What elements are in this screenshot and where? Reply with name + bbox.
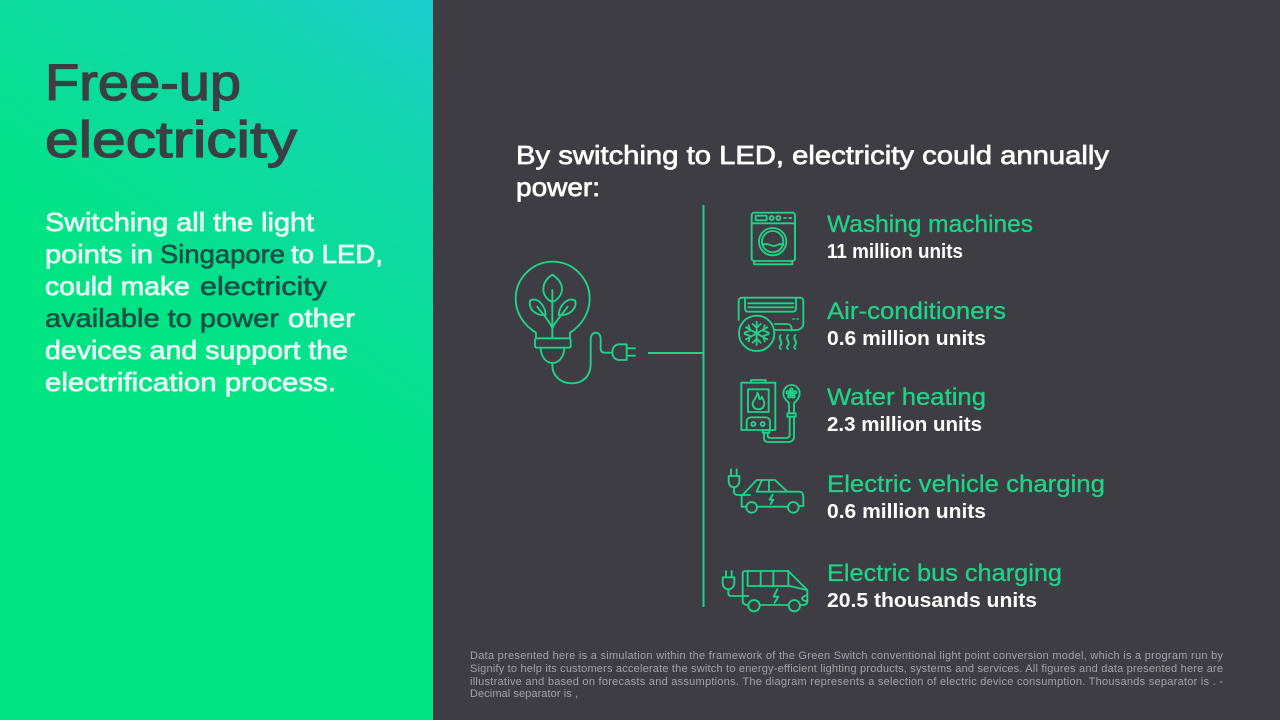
list item: washing machines — [827, 211, 1033, 263]
panel: green gradient sidebar — [0, 0, 433, 720]
list item: electric bus charging: Electric bus charging — [827, 560, 1062, 587]
icon: electric bus with plug — [723, 571, 807, 611]
list item: electric vehicle charging: 0.6 million units — [827, 501, 986, 523]
footnote — [470, 650, 1224, 700]
list item: water heating — [827, 384, 986, 436]
icon: water heater and charger — [741, 380, 800, 442]
icon: light bulb with plant and plug — [516, 262, 635, 383]
title: electricity — [45, 111, 298, 168]
text block: intro paragraph: Switching all the light — [45, 207, 315, 237]
text block: intro paragraph: to LED, — [291, 239, 383, 269]
footnote: illustrative and based on forecasts and assumptions. The diagram represents a selection of electric device consumption. Thousands separator is . - — [470, 676, 1223, 688]
list item: air-conditioners: 0.6 million units — [827, 328, 986, 350]
heading: by switching to LED: By switching to LED, electricity could annually — [516, 140, 1109, 170]
list item: air-conditioners: Air-conditioners — [827, 298, 1006, 325]
text block: intro paragraph: electricity — [200, 271, 327, 301]
footnote: Data presented here is a simulation within the framework of the Green Switch conventional light point conversion model, which is a program run by — [470, 650, 1224, 662]
heading: by switching to LED: power: — [516, 172, 600, 202]
list item: washing machines: 11 million units — [827, 241, 963, 263]
connector: vertical bracket line — [648, 205, 704, 607]
text block: intro paragraph: Singapore — [160, 239, 285, 269]
list item: water heating: 2.3 million units — [827, 414, 982, 436]
text block: intro paragraph: other — [288, 303, 355, 333]
title: Free-up — [45, 54, 241, 111]
list item: air-conditioners — [827, 298, 1006, 350]
list item: electric bus charging — [827, 560, 1062, 612]
list item: electric vehicle charging: Electric vehicle charging — [827, 471, 1105, 498]
text block: intro paragraph — [45, 207, 383, 397]
list item: water heating: Water heating — [827, 384, 986, 411]
text block: intro paragraph: electrification process. — [45, 367, 336, 397]
footnote: Decimal separator is , — [470, 688, 578, 700]
heading: by switching to LED — [516, 140, 1109, 202]
text block: intro paragraph: could make — [45, 271, 190, 301]
text block: intro paragraph: available to power — [45, 303, 279, 333]
icon: air conditioner — [739, 298, 803, 351]
list item: washing machines: Washing machines — [827, 211, 1033, 238]
text block: intro paragraph: points in — [45, 239, 153, 269]
text block: intro paragraph: devices and support the — [45, 335, 348, 365]
list item: electric bus charging: 20.5 thousands units — [827, 590, 1037, 612]
footnote: Signify to help its customers accelerate the switch to energy-efficient lighting products, systems and services. All figures and data presented here are — [470, 663, 1223, 675]
icon: washing machine — [752, 213, 795, 264]
list item: electric vehicle charging — [827, 471, 1105, 523]
icon: electric car with plug — [729, 469, 803, 513]
title — [45, 54, 298, 168]
